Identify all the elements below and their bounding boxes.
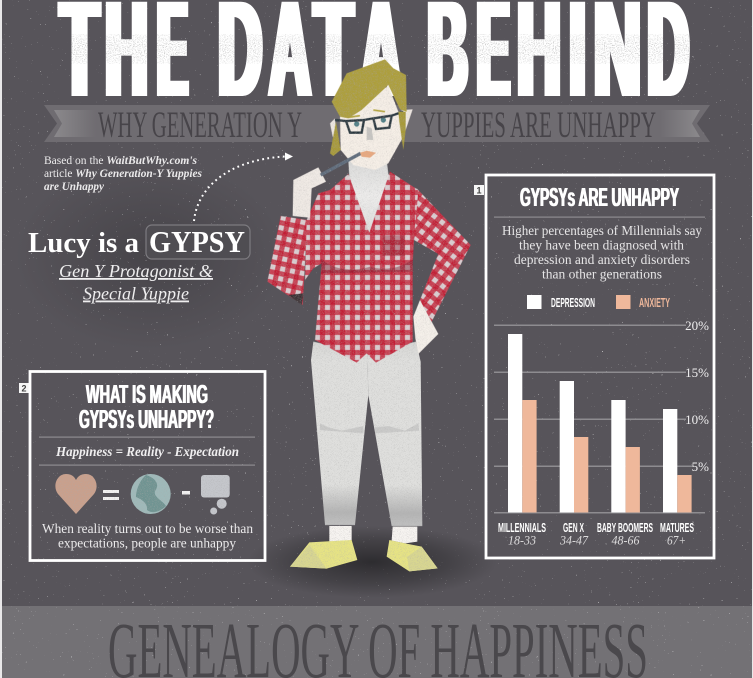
face: [340, 86, 402, 170]
lower body: [290, 342, 438, 571]
left hand: [293, 167, 326, 218]
Lucy is a GYPSY heading: Lucy is a: [28, 227, 139, 259]
panel 2 heading: WHAT IS MAKING: [86, 379, 208, 409]
figure: Lucy: [267, 59, 471, 571]
shirt waist shade: [321, 258, 413, 273]
lips: [360, 151, 376, 158]
panel 2 caption: When reality turns out to be worse than: [42, 522, 253, 537]
category labels: MATURES: [660, 521, 694, 535]
knee creases: [320, 423, 419, 433]
axis labels: 5%: [692, 459, 709, 474]
right trouser leg: [367, 342, 422, 526]
neck and chest: [348, 160, 394, 233]
age ranges: 34-47: [559, 532, 588, 548]
panel 2 heading: [79, 379, 214, 434]
socks: [329, 526, 417, 546]
age ranges: [508, 532, 686, 548]
happiness formula: Happiness = Reality - Expectation: [55, 445, 239, 460]
right ear: [402, 109, 413, 135]
shirt body: [305, 172, 418, 363]
title: The Data Behind: [60, 0, 689, 126]
panel 1 description: than other generations: [542, 268, 662, 282]
source note: are Unhappy: [44, 181, 105, 193]
ribbon text: WHY GENERATION Y: [98, 105, 302, 146]
icon: equals: [103, 490, 119, 500]
right shoe: [387, 540, 438, 571]
axis labels: 15%: [685, 365, 709, 380]
panel 2 number tag: [19, 383, 29, 394]
panel 1: GYPSYs are unhappy: [486, 175, 714, 558]
bars: Baby Boomers: [611, 400, 640, 512]
bars: Millennials: [508, 334, 537, 512]
age ranges: 18-33: [508, 532, 536, 548]
source note: Based on the WaitButWhy.com's: [44, 155, 198, 167]
upper body: [267, 59, 471, 363]
category labels: BABY BOOMERS: [597, 521, 653, 535]
cuff sleeve: [267, 216, 307, 305]
eyes: [354, 121, 359, 127]
Lucy subtitle: [59, 261, 213, 304]
chart legend: DEPRESSION: [551, 295, 595, 310]
source note: article Why Generation-Y Yuppies: [44, 168, 203, 180]
bars: Gen X: [560, 381, 588, 512]
shirt pocket: [383, 235, 405, 256]
eyebrows: [348, 110, 385, 117]
left ear: [330, 118, 337, 138]
panel 1 description: [502, 224, 702, 282]
bar chart: [494, 216, 709, 514]
icon: globe: [131, 474, 171, 514]
panel 1 description: Higher percentages of Millennials say: [502, 224, 702, 239]
right arm sleeve: [414, 188, 471, 322]
Lucy subtitle: Special Yuppie: [83, 284, 189, 304]
left shoe: [290, 540, 357, 569]
category labels: GEN X: [563, 521, 584, 535]
hair: [332, 59, 407, 118]
icon: minus: [182, 491, 190, 494]
panel 2: what is making GYPSYs unhappy: [30, 372, 265, 560]
age ranges: 67+: [667, 532, 686, 548]
Lucy subtitle: Gen Y Protagonist &: [59, 261, 213, 281]
source note: [44, 155, 203, 193]
panel 1 description: depression and anxiety disorders: [514, 253, 690, 268]
nose: [367, 127, 373, 140]
icon: thought bubble: [201, 475, 230, 514]
glasses: [335, 112, 403, 133]
right hand: [413, 300, 438, 354]
panel 1 number tag: [474, 185, 484, 196]
dotted arrow to Lucy: [194, 152, 293, 221]
bars: Matures: [663, 409, 692, 512]
pen: [321, 153, 361, 175]
category labels: [498, 521, 694, 535]
panel 1 number tag: 1: [476, 186, 482, 196]
icon: heart: [55, 474, 97, 514]
Lucy is a GYPSY heading: GYPSY: [149, 224, 245, 259]
panel 1 description: they have been diagnosed with: [519, 238, 684, 254]
chart legend: ANXIETY: [639, 295, 670, 310]
left trouser leg: [311, 342, 368, 525]
axis labels: 10%: [685, 412, 709, 427]
GYPSY highlight box: [146, 225, 250, 259]
panel 2 caption: [42, 522, 253, 552]
icon equation: [55, 474, 230, 514]
panel 2 heading: GYPSYs UNHAPPY?: [79, 404, 214, 434]
cuff shade: [288, 293, 303, 305]
age ranges: 48-66: [612, 532, 640, 548]
category labels: MILLENNIALS: [498, 521, 546, 535]
axis labels: [685, 318, 709, 474]
ribbon text: [98, 105, 656, 146]
subtitle ribbon: [44, 105, 710, 146]
axis labels: 20%: [685, 318, 709, 333]
Lucy is a GYPSY heading: [28, 224, 250, 259]
panel 2 number tag: 2: [21, 384, 27, 394]
hair strands: [330, 112, 406, 156]
floor shadow: [247, 526, 497, 598]
chart legend: [527, 295, 670, 310]
panel 2 caption: expectations, people are unhappy: [58, 536, 236, 552]
